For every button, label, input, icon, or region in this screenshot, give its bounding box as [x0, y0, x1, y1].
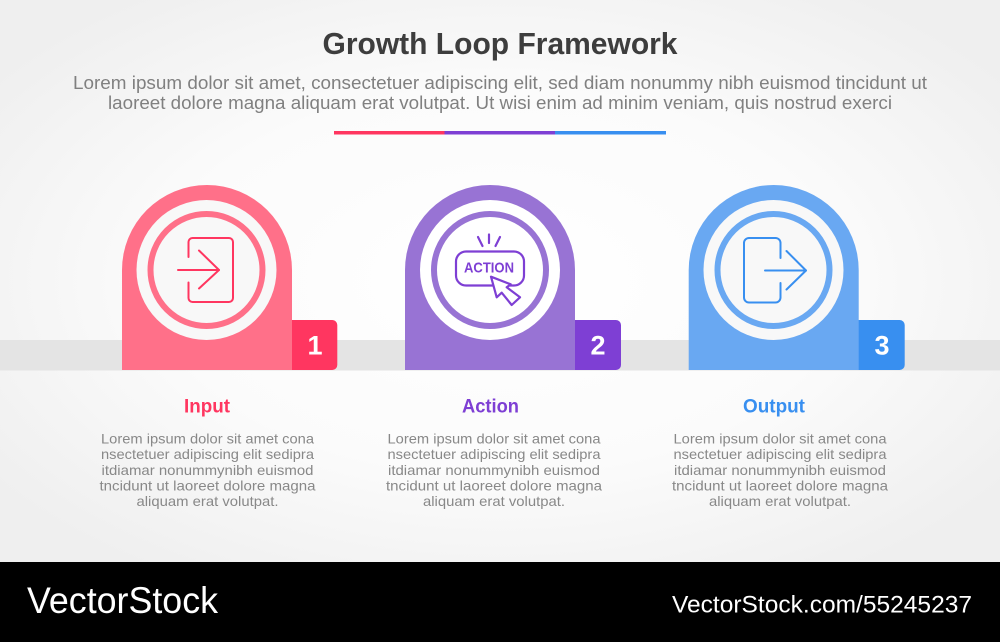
- ring: output: [718, 214, 830, 326]
- panel: action: [386, 185, 621, 509]
- text block: action: itdiamar nonummynibh euismod: [388, 462, 600, 478]
- footer bar: [0, 562, 1000, 642]
- subtitle text block: laoreet dolore magna aliquam erat volutpat. Ut wisi enim ad minim veniam, quis nostrud exerci: [108, 92, 892, 113]
- text block: input: Lorem ipsum dolor sit amet cona: [101, 430, 314, 446]
- text block: input: itdiamar nonummynibh euismod: [102, 462, 314, 478]
- icon: action button with cursor: [456, 234, 524, 305]
- marker shape: action: [405, 185, 575, 370]
- badge: 3: [858, 320, 905, 370]
- icon: exit arrow: [744, 238, 806, 302]
- badge: 3: 3: [874, 330, 890, 360]
- ring: input: [150, 214, 262, 326]
- marker shape: input: [122, 185, 292, 370]
- text block: output: nsectetuer adipiscing elit sedipra: [674, 446, 887, 462]
- horizontal grey band: [0, 340, 1000, 370]
- text block: input: tncidunt ut laoreet dolore magna: [100, 478, 316, 494]
- text block: output: [672, 430, 888, 509]
- footer url: VectorStock.com/55245237: [672, 592, 972, 618]
- tricolor divider: [334, 131, 666, 134]
- badge: 2: 2: [590, 330, 606, 360]
- text block: output: tncidunt ut laoreet dolore magna: [672, 478, 888, 494]
- text block: action: tncidunt ut laoreet dolore magna: [386, 478, 602, 494]
- text block: output: Lorem ipsum dolor sit amet cona: [674, 430, 887, 446]
- heading: action: Action: [462, 396, 519, 418]
- text block: input: aliquam erat volutpat.: [136, 493, 278, 509]
- text block: input: nsectetuer adipiscing elit sedipra: [101, 446, 314, 462]
- text block: action: Lorem ipsum dolor sit amet cona: [388, 430, 601, 446]
- white circle: output: [704, 200, 844, 340]
- text block: input: [100, 430, 316, 509]
- badge: 1: [291, 320, 337, 370]
- badge: 2: [574, 320, 621, 370]
- white circle: action: [420, 200, 560, 340]
- subtitle text block: Lorem ipsum dolor sit amet, consectetuer adipiscing elit, sed diam nonummy nibh euismod tincidunt ut: [73, 72, 927, 93]
- text block: output: itdiamar nonummynibh euismod: [674, 462, 886, 478]
- subtitle text block: [73, 72, 927, 113]
- heading: input: Input: [184, 396, 231, 418]
- ring: action: [434, 214, 546, 326]
- icon: action button with cursor: ACTION: [464, 260, 514, 276]
- panel: input: [100, 185, 337, 509]
- text block: output: aliquam erat volutpat.: [709, 493, 851, 509]
- title: Growth Loop Framework: [322, 26, 678, 61]
- text block: action: aliquam erat volutpat.: [423, 493, 565, 509]
- marker shape: output: [689, 185, 859, 370]
- white circle: input: [136, 200, 276, 340]
- footer brand: VectorStock: [27, 580, 218, 621]
- panel: output: [672, 185, 905, 509]
- text block: action: [386, 430, 602, 509]
- badge: 1: 1: [307, 330, 323, 360]
- icon: enter arrow: [178, 238, 233, 302]
- text block: action: nsectetuer adipiscing elit sedipra: [388, 446, 601, 462]
- heading: output: Output: [743, 396, 806, 418]
